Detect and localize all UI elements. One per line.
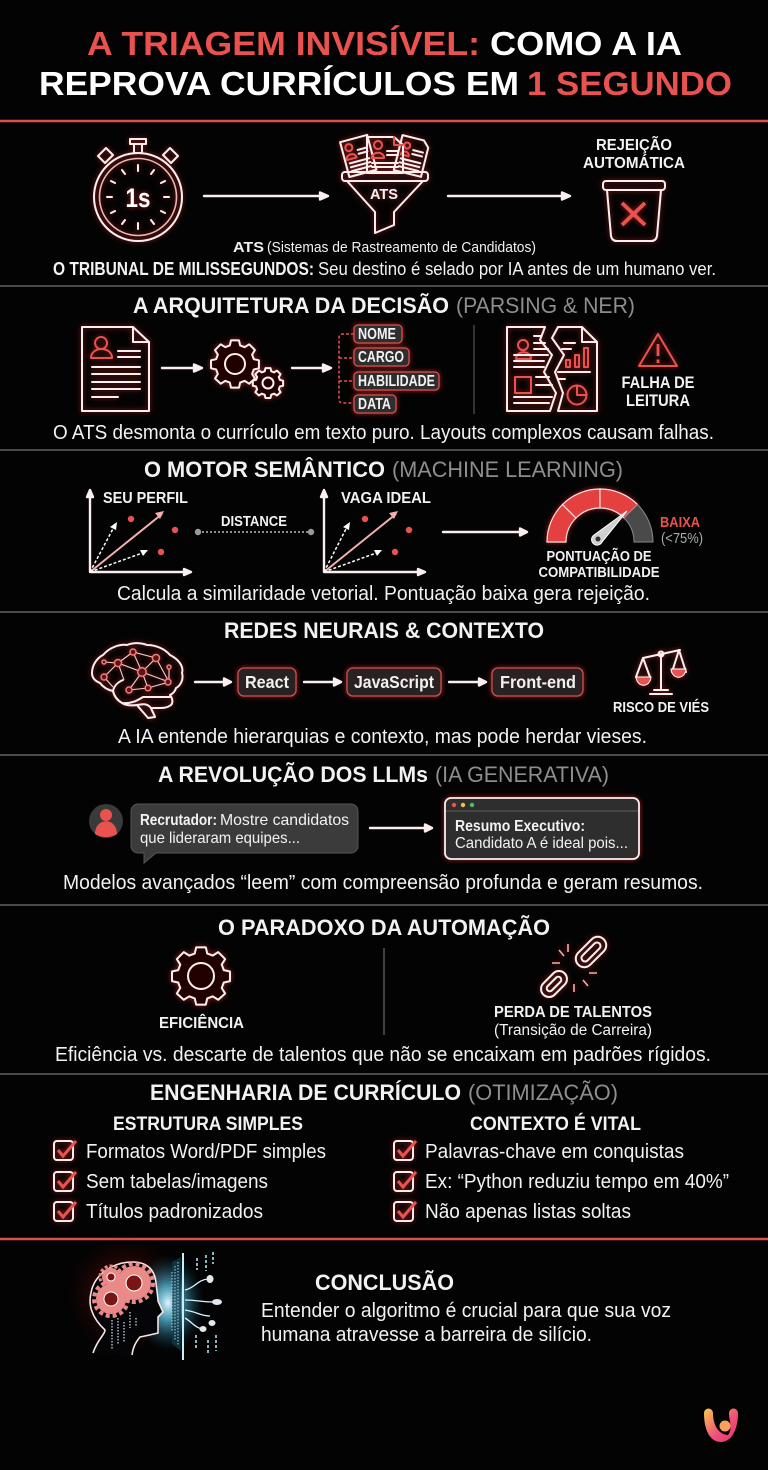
title: A TRIAGEM INVISÍVEL:: [87, 25, 480, 62]
list: contexto é vital: Não apenas listas soltas: [425, 1201, 631, 1223]
box: JavaScript: JavaScript: [354, 672, 434, 692]
icon: broken chain: [538, 933, 610, 1000]
heading: (PARSING & NER): [456, 293, 635, 318]
check icons right: [394, 1141, 416, 1221]
callout: executive summary window: Resumo Executivo:: [455, 818, 585, 835]
text: ATS definition: (Sistemas de Rastreamento de Candidatos): [267, 240, 536, 256]
panel: revolução dos LLMs: [63, 762, 703, 894]
tags: extracted fields: DATA: [358, 396, 391, 413]
icon: neural brain: [92, 643, 183, 718]
heading: (OTIMIZAÇÃO): [468, 1080, 618, 1105]
icon: trash bin: [603, 181, 665, 241]
callout: executive summary window: Candidato A é ideal pois...: [455, 835, 628, 852]
callout: recruiter speech bubble: [131, 804, 358, 863]
arrow: ATS to rejection: [448, 192, 570, 200]
heading: REDES NEURAIS & CONTEXTO: [224, 618, 544, 643]
text: tribunal summary: [53, 259, 716, 279]
list: estrutura simples: Sem tabelas/imagens: [86, 1171, 268, 1193]
label: falha de leitura: FALHA DE: [622, 374, 694, 392]
list: contexto é vital: Ex: “Python reduziu tempo em 40%”: [425, 1171, 729, 1193]
icon: gears: [211, 340, 283, 398]
arrow: brain to React: [195, 678, 231, 686]
heading: [158, 762, 609, 787]
label: risco de viés: RISCO DE VIÉS: [613, 699, 709, 716]
label: falha de leitura: [622, 374, 694, 410]
label: rejeição automática: [583, 136, 685, 172]
chart: vaga ideal vectors: VAGA IDEAL: [341, 490, 431, 507]
panel: arquitetura da decisão: [53, 293, 714, 444]
label: perda de talentos: [494, 1004, 652, 1039]
list: estrutura simples: [54, 1113, 326, 1223]
heading: O PARADOXO DA AUTOMAÇÃO: [218, 915, 550, 940]
chart: seu perfil vectors: SEU PERFIL: [103, 490, 188, 507]
icon: broken document: [507, 327, 597, 411]
icon: stopwatch: 1s: [126, 183, 150, 213]
tags: extracted fields: CARGO: [358, 349, 404, 366]
label: rejeição automática: REJEIÇÃO: [596, 136, 672, 154]
list: estrutura simples: Formatos Word/PDF simples: [86, 1141, 326, 1163]
label: falha de leitura: LEITURA: [626, 392, 690, 410]
callout: recruiter speech bubble: Recrutador:: [140, 812, 217, 829]
panel: engenharia de currículo: [54, 1080, 729, 1223]
label: pontuação de compatibilidade: PONTUAÇÃO DE: [546, 547, 652, 565]
icon: ATS funnel: [340, 135, 430, 233]
arrow: bubble to summary: [370, 824, 432, 832]
panel: redes neurais: [92, 618, 709, 748]
list: estrutura simples: Títulos padronizados: [86, 1201, 263, 1223]
chart: seu perfil vectors: [87, 490, 191, 575]
arrow: gears to tags: [292, 364, 331, 372]
box: JavaScript: [347, 668, 441, 696]
box: React: React: [245, 672, 289, 692]
icon: human head and AI circuit: [67, 1237, 222, 1360]
icon: brand logo: [704, 1408, 738, 1442]
label: rejeição automática: AUTOMÁTICA: [583, 155, 685, 172]
text: paradox summary: Eficiência vs. descarte de talentos que não se encaixam em padrões rígidos.: [55, 1044, 711, 1066]
label: pontuação de compatibilidade: COMPATIBILIDADE: [538, 565, 660, 581]
icon: efficiency gear: [172, 947, 230, 1005]
tags: extracted fields: [339, 325, 439, 413]
label: perda de talentos: PERDA DE TALENTOS: [494, 1004, 652, 1021]
box: Front-end: Front-end: [500, 672, 576, 692]
text: semantic summary: Calcula a similaridade vetorial. Pontuação baixa gera rejeição.: [117, 583, 650, 605]
heading: A REVOLUÇÃO DOS LLMs: [158, 762, 428, 787]
title: 1 SEGUNDO: [527, 65, 732, 102]
arrow: React to JavaScript: [304, 678, 341, 686]
chart: vaga ideal vectors: [321, 490, 431, 575]
icon: resume document: [82, 327, 149, 411]
tags: extracted fields: NOME: [358, 326, 396, 343]
check icons left: [54, 1141, 76, 1221]
title: REPROVA CURRÍCULOS EM: [39, 65, 519, 102]
text: conclusion: Entender o algoritmo é crucial para que sua voz: [261, 1300, 671, 1322]
icon: warning triangle: [639, 334, 677, 366]
text: ATS definition: ATS: [233, 240, 264, 256]
title: COMO A IA: [490, 25, 682, 62]
callout: recruiter speech bubble: que lideraram equipes...: [140, 830, 300, 847]
text: tribunal summary: O TRIBUNAL DE MILISSEGUNDOS:: [53, 259, 314, 279]
heading: ENGENHARIA DE CURRÍCULO: [150, 1080, 461, 1105]
label: baixa: [660, 515, 703, 547]
box: Front-end: [492, 668, 583, 696]
heading: [133, 293, 635, 318]
icon: recruiter avatar: [89, 804, 123, 838]
heading: A ARQUITETURA DA DECISÃO: [133, 293, 449, 318]
arrow: document to gears: [162, 364, 202, 372]
box: React: [238, 668, 296, 696]
list: estrutura simples: ESTRUTURA SIMPLES: [113, 1113, 303, 1135]
text: LLM summary: Modelos avançados “leem” com compreensão profunda e geram resumos.: [63, 872, 703, 894]
icon: stopwatch: [94, 139, 182, 241]
panel: paradoxo da automação: [55, 915, 711, 1066]
text: conclusion: humana atravesse a barreira de silício.: [261, 1324, 592, 1346]
label: distance connector: DISTANCE: [221, 514, 287, 530]
label: pontuação de compatibilidade: [538, 547, 660, 581]
callout: executive summary window: [445, 798, 639, 859]
label: baixa: BAIXA: [660, 515, 700, 531]
heading: (MACHINE LEARNING): [392, 457, 623, 482]
text: conclusion: [261, 1300, 671, 1346]
text: neural summary: A IA entende hierarquias e contexto, mas pode herdar vieses.: [118, 726, 647, 748]
arrow: vectors to gauge: [443, 528, 527, 536]
list: contexto é vital: [394, 1112, 729, 1223]
text: parsing summary: O ATS desmonta o currículo em texto puro. Layouts complexos causam falhas.: [53, 422, 714, 444]
list: contexto é vital: Palavras-chave em conquistas: [425, 1141, 684, 1163]
icon: scales of bias: [636, 650, 686, 694]
text: tribunal summary: Seu destino é selado por IA antes de um humano ver.: [318, 259, 716, 279]
heading: conclusão: CONCLUSÃO: [315, 1270, 454, 1295]
heading: O MOTOR SEMÂNTICO: [144, 457, 385, 482]
chart: compatibility gauge: [547, 489, 653, 545]
arrow: stopwatch to ATS: [204, 192, 328, 200]
list: contexto é vital: CONTEXTO É VITAL: [470, 1112, 641, 1135]
panel: motor semântico: [87, 457, 703, 605]
tags: extracted fields: HABILIDADE: [358, 373, 435, 390]
heading: (IA GENERATIVA): [435, 762, 609, 787]
label: baixa: (<75%): [661, 531, 703, 547]
label: perda de talentos: (Transição de Carreira): [494, 1022, 652, 1039]
arrow: JavaScript to Front-end: [449, 678, 486, 686]
panel: tribunal de milissegundos: [53, 135, 716, 279]
heading: [150, 1080, 618, 1105]
title: [39, 25, 732, 102]
label: eficiência: EFICIÊNCIA: [159, 1013, 244, 1032]
heading: [144, 457, 623, 482]
panel: conclusão: [67, 1237, 671, 1360]
icon: ATS funnel: ATS: [370, 186, 398, 203]
callout: recruiter speech bubble: Mostre candidatos: [220, 812, 349, 829]
label: distance connector: [195, 514, 314, 535]
